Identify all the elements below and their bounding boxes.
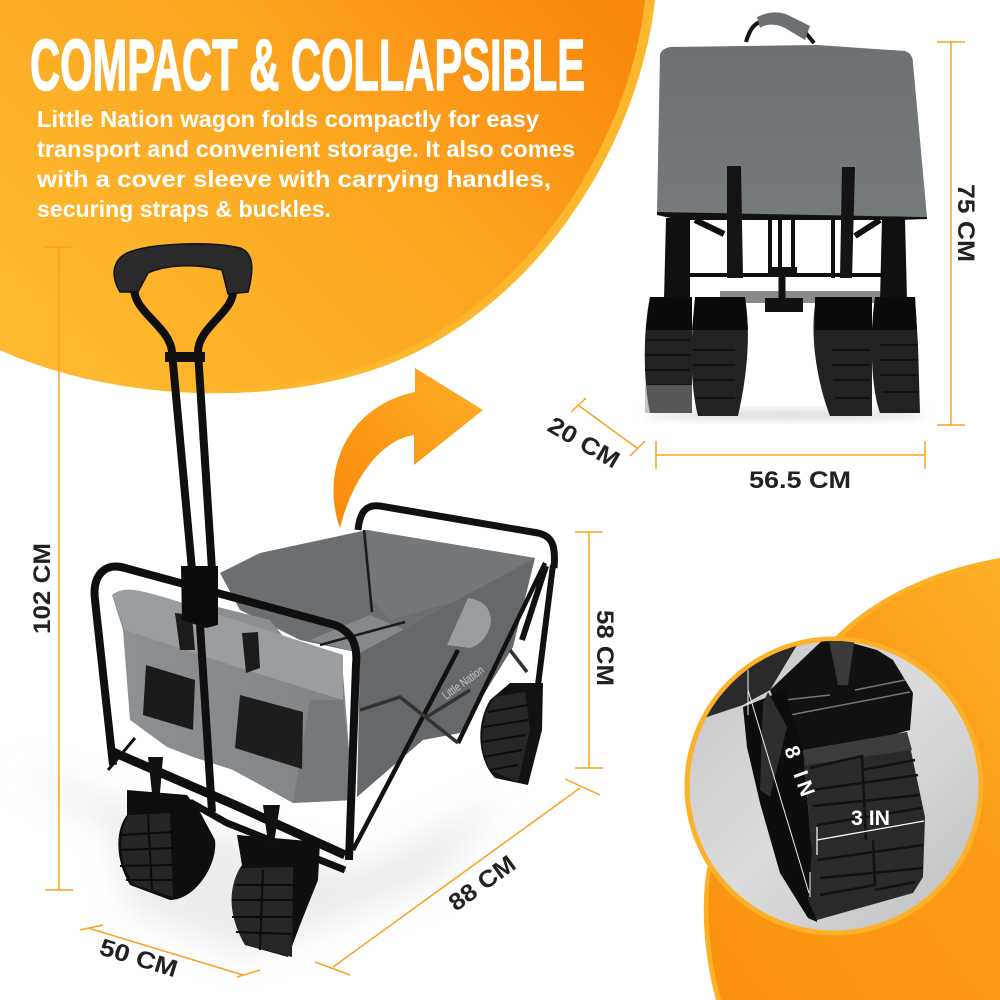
folded wheel 1 xyxy=(645,297,692,413)
fork highlights xyxy=(785,680,910,715)
wheel tread xyxy=(803,732,925,920)
dimension: 88 CM: 88 CM xyxy=(444,850,521,917)
left front wheel xyxy=(118,757,215,900)
dimension: 102 CM xyxy=(29,247,73,890)
front fabric fold band xyxy=(112,590,343,700)
folded rear fabric behind front panel xyxy=(215,607,283,647)
cover hem xyxy=(657,212,927,220)
dimension: 20 CM: 20 CM xyxy=(543,412,624,474)
right strap xyxy=(840,167,855,278)
right mesh pocket xyxy=(235,695,303,769)
3 IN label: 3 IN xyxy=(851,807,890,830)
side X brace xyxy=(353,563,545,850)
interior frame lines xyxy=(320,530,405,645)
rear frame rail xyxy=(358,506,554,568)
side latch xyxy=(760,692,787,797)
fabric straps xyxy=(175,613,260,673)
wheel close-up circle xyxy=(680,636,981,933)
dimension: 75 CM: 75 CM xyxy=(952,184,979,262)
folded wagon photo xyxy=(645,12,927,419)
dimension: 58 CM xyxy=(575,532,618,768)
description text: Little Nation wagon folds compactly for easy xyxy=(37,106,539,132)
8 IN label: 8 IN xyxy=(779,743,819,800)
folded wheel 4 xyxy=(872,297,920,413)
front frame xyxy=(95,567,356,870)
carry handle grip xyxy=(757,12,810,40)
fabric shade xyxy=(293,700,353,803)
front fabric panel xyxy=(112,595,353,803)
left mesh pocket xyxy=(143,665,195,730)
side fabric panel xyxy=(357,558,535,797)
description text: with a cover sleeve with carrying handles, xyxy=(36,166,551,192)
description text xyxy=(36,106,575,222)
cover sleeve xyxy=(657,45,927,217)
shadow under folded wagon xyxy=(645,411,925,419)
frame arm xyxy=(706,646,796,718)
icon: curved arrow xyxy=(334,368,483,528)
wagon brand text: Little Nation xyxy=(440,663,487,702)
folded wheel 2 xyxy=(692,297,748,416)
interior floor xyxy=(310,615,405,653)
fork body xyxy=(770,636,913,760)
rear legs xyxy=(522,565,553,685)
right front wheel xyxy=(232,805,320,957)
bottom right orange background shape xyxy=(704,558,1000,1000)
dimension: 58 CM: 58 CM xyxy=(591,610,618,686)
dimension: 50 CM: 50 CM xyxy=(96,934,181,983)
telescoping handle xyxy=(114,244,252,812)
dimension: 88 CM xyxy=(315,779,600,975)
folded frame xyxy=(664,218,907,300)
title: COMPACT & COLLAPSIBLE xyxy=(30,26,585,106)
8 IN measure line xyxy=(748,670,810,897)
carry handle xyxy=(746,21,814,43)
wheel side xyxy=(743,690,817,922)
description text: transport and convenient storage. It also comes xyxy=(37,136,575,162)
fork post xyxy=(829,641,854,685)
rear wheel xyxy=(480,683,543,785)
folded wheel 3 xyxy=(813,297,872,416)
ground shadow xyxy=(20,770,500,955)
dimension: 20 CM xyxy=(543,398,645,474)
dimension: 75 CM xyxy=(937,42,979,425)
side pocket flap xyxy=(447,598,491,648)
tread top highlight xyxy=(803,732,912,765)
wagon interior fabric xyxy=(220,530,535,653)
unfolded wagon photo xyxy=(20,244,554,957)
tread grooves xyxy=(810,756,923,895)
folded frame buckle xyxy=(765,267,803,312)
left strap xyxy=(727,166,743,278)
dimension: 102 CM: 102 CM xyxy=(29,543,56,634)
interior back panel xyxy=(367,530,535,620)
dimension: 50 CM xyxy=(80,925,260,983)
dimension: 56.5 CM: 56.5 CM xyxy=(749,467,851,494)
description text: securing straps & buckles. xyxy=(37,196,331,222)
top orange background shape xyxy=(0,0,655,393)
3 IN measure line xyxy=(817,821,924,855)
dimension: 56.5 CM xyxy=(656,441,925,494)
